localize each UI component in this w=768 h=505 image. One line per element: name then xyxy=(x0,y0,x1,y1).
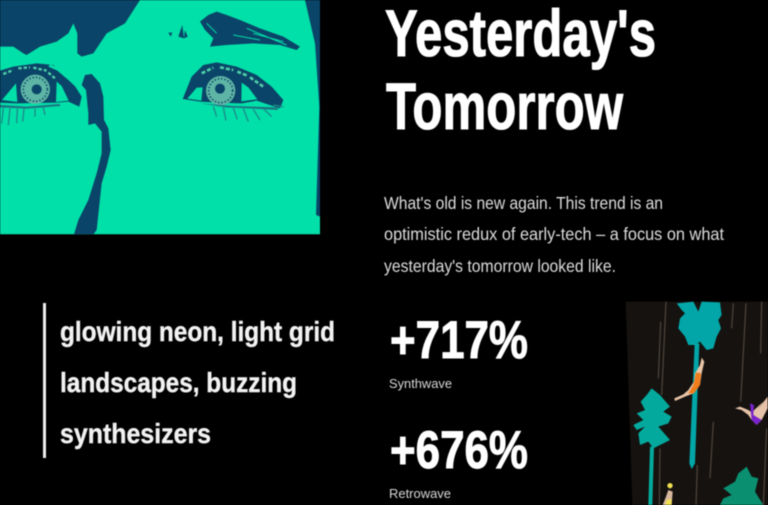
stat: Synthwave: +717% xyxy=(390,311,528,370)
forehead specks xyxy=(168,25,188,38)
purple diver xyxy=(735,397,768,425)
intro paragraph: optimistic redux of early-tech – a focus on what xyxy=(384,224,724,244)
stat: Synthwave: Synthwave xyxy=(389,376,452,391)
quote text: landscapes, buzzing xyxy=(60,367,297,398)
hair top left xyxy=(0,0,140,57)
hair strand right edge xyxy=(305,0,320,217)
stat: Retrowave: Retrowave xyxy=(389,486,451,501)
intro paragraph: yesterday's tomorrow looked like. xyxy=(384,256,616,276)
stat: Retrowave xyxy=(389,421,528,501)
title xyxy=(385,0,656,143)
left eye xyxy=(0,63,82,125)
hair strand center xyxy=(74,74,111,234)
eyebrow xyxy=(200,12,300,50)
quote bar xyxy=(43,303,46,458)
right eye xyxy=(183,62,283,122)
yellow figure xyxy=(663,483,673,505)
orange diver xyxy=(674,358,704,401)
quote text: glowing neon, light grid xyxy=(60,316,335,347)
tall palm xyxy=(677,302,722,469)
intro paragraph: What's old is new again. This trend is an xyxy=(384,193,663,213)
stat: Retrowave: +676% xyxy=(390,421,528,480)
green palm bottom xyxy=(720,467,763,505)
title: Tomorrow xyxy=(386,69,623,143)
image: duotone face with eyes xyxy=(0,0,320,234)
intro paragraph xyxy=(384,193,724,276)
stat: Synthwave xyxy=(389,311,528,391)
quote text xyxy=(60,316,335,449)
quote text: synthesizers xyxy=(60,418,211,449)
lower left palm xyxy=(633,388,672,505)
image: palm trees and divers xyxy=(626,302,768,505)
